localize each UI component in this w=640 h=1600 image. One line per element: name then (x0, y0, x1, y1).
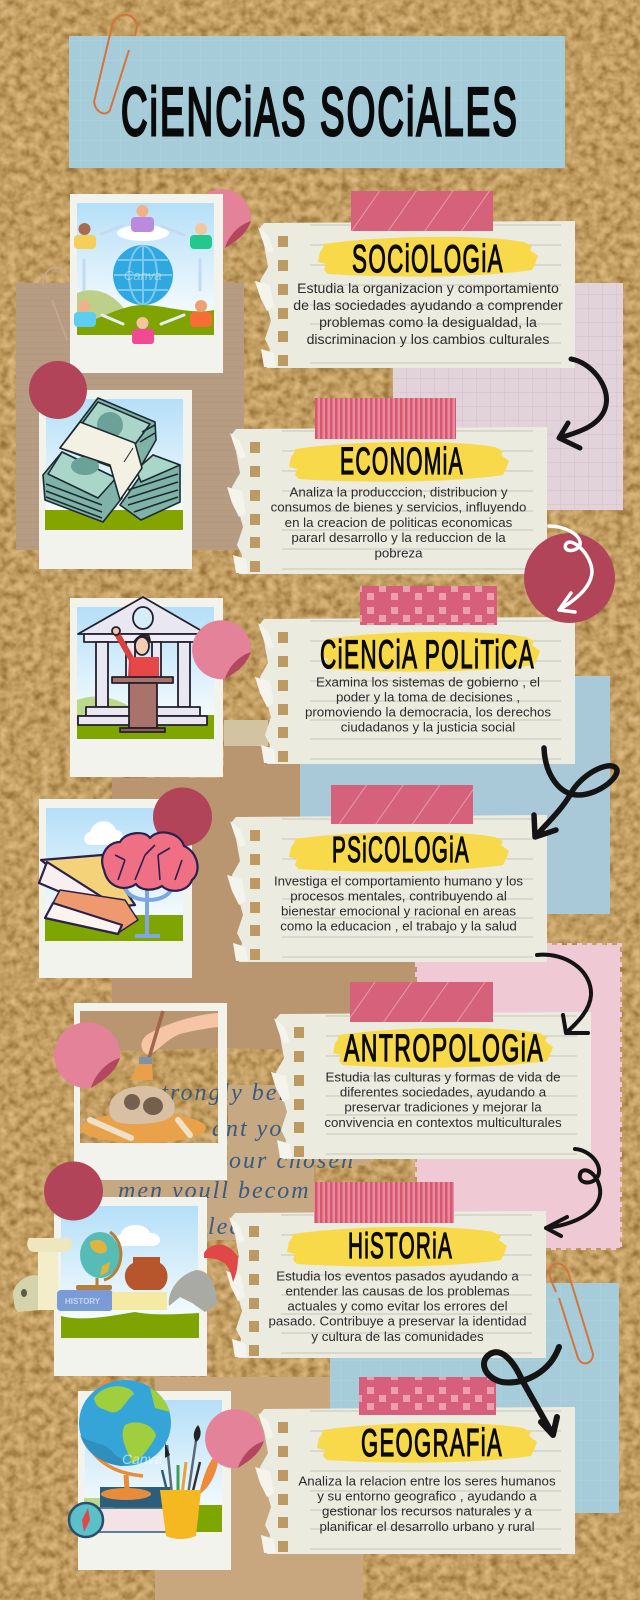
sticker: pink circle 3 (192, 620, 251, 679)
text block: discriminacion y los cambios culturales (307, 331, 549, 347)
heading: HiSTORiA (348, 1225, 453, 1266)
text block: consumos de bienes y servicios, influyendo (271, 500, 526, 514)
sticker: dark red circle 6 (44, 1162, 103, 1220)
panel: photo ciencia politica (70, 597, 223, 777)
highlight (289, 832, 509, 872)
arrow 6 (484, 1347, 559, 1435)
text block: como la educacion , el trabajo y la salud (280, 918, 517, 934)
heading: GEOGRAFiA (361, 1422, 503, 1465)
icon: globe, pencils, compass: Canva (122, 1451, 163, 1467)
text block: Estudia los eventos pasados ayudando a (276, 1268, 519, 1284)
icon: helmet with red plume (169, 1244, 238, 1312)
text block: actuales y como evitar los errores del (287, 1298, 508, 1314)
text block (324, 1070, 562, 1130)
tape (331, 785, 473, 824)
panel: psicologia (227, 785, 547, 962)
panel: photo antropologia (74, 1003, 227, 1180)
arrow 3 (534, 748, 617, 837)
text block: Estudia las culturas y formas de vida de (325, 1070, 561, 1084)
panel: photo economia (39, 390, 192, 569)
paper: light tape band (224, 720, 268, 746)
text block: entender las causas de los problemas (286, 1284, 510, 1298)
text block: Examina los sistemas de gobierno , el (316, 674, 540, 690)
text block: ciudadanos y la justicia social (341, 720, 515, 734)
icon: network of people (74, 205, 214, 344)
highlight (318, 237, 538, 277)
highlight (289, 442, 509, 482)
text block: Investiga el comportamiento humano y los (274, 874, 523, 888)
highlight (287, 1227, 507, 1267)
text block: Estudia la organizacion y comportamiento (297, 280, 559, 296)
text block (274, 874, 523, 934)
illustration: books and brain overlay (39, 832, 198, 936)
heading: SOCiOLOGiA (352, 238, 504, 281)
text block: pararl desarrollo y la reduccion de la (291, 530, 506, 545)
tape (360, 586, 497, 625)
panel: historia (226, 1182, 546, 1358)
icon: politician at podium in front of building (77, 597, 214, 739)
icon: sky and grass (45, 821, 183, 941)
handwritten script background: leers (208, 1214, 265, 1240)
icon: history objects: HISTORY (65, 1297, 101, 1306)
paper clip: faint (43, 268, 69, 340)
paper: pink stamp (417, 945, 620, 1248)
text block (305, 674, 551, 734)
tape (315, 398, 456, 439)
handwritten script background: men youll becom (118, 1178, 311, 1204)
text block (271, 484, 526, 560)
panel: sociologia (255, 191, 575, 368)
sticker: dark red circle 2 (29, 361, 87, 419)
text block: convivencia en contextos multiculturales (324, 1115, 562, 1130)
paper: blue grid lower (330, 1283, 619, 1513)
arrow 5 (546, 1149, 600, 1236)
panel: photo psicologia (39, 799, 192, 978)
paper: blue strip middle (299, 676, 610, 914)
text block: de las sociedades ayudando a comprender (293, 297, 563, 313)
panel: photo historia (13, 1197, 207, 1376)
icon: network of people: Canva (124, 268, 162, 283)
text block: y cultura de las comunidades (311, 1329, 484, 1344)
text block: Analiza la producccion, distribucion y (289, 484, 508, 500)
text block: gestionar los recursos naturales y a (322, 1504, 533, 1518)
text block: procesos mentales, contribuyendo al (290, 888, 507, 904)
text block: planificar el desarrollo urbano y rural (319, 1519, 535, 1534)
tape (359, 1377, 496, 1415)
paper: kraft middle (74, 720, 418, 1052)
tape (314, 1182, 454, 1223)
text block (293, 280, 563, 347)
highlight (333, 1028, 553, 1068)
arrow 4 (537, 955, 591, 1033)
highlight (317, 1423, 537, 1463)
text block: promoviendo la democracia, los derechos (305, 704, 551, 720)
text block: problemas como la desigualdad, la (319, 314, 537, 330)
tape (350, 982, 493, 1022)
sticker: pink circle 7 (205, 1409, 264, 1468)
panel: photo sociologia (70, 194, 223, 373)
text block: en la creacion de politicas economicas (285, 515, 513, 530)
text block: poder y la toma de decisiones , (336, 690, 520, 704)
sticker: big red circle (524, 533, 615, 623)
title panel (69, 36, 565, 168)
icon: globe, pencils, compass (69, 1378, 222, 1539)
text block (298, 1474, 556, 1534)
heading: PSiCOLOGiA (332, 829, 470, 870)
panel: photo geografia (69, 1378, 231, 1570)
tape (351, 191, 493, 231)
text block (269, 1268, 526, 1344)
highlight (320, 632, 540, 672)
text block: preservar tradiciones y mejorar la (344, 1100, 542, 1114)
icon: history objects (13, 1225, 199, 1338)
handwritten script background: our chosen (229, 1148, 355, 1174)
handwritten script background: ant you (212, 1116, 297, 1142)
sticker: dark red circle 4 (153, 788, 212, 846)
panel: ciencia politica (255, 586, 575, 764)
text block: pobreza (374, 546, 423, 560)
handwritten script background: strongly belie (150, 1080, 308, 1106)
paper: script note (102, 1085, 370, 1240)
panel: economia (227, 398, 547, 574)
sticker: pink circle 5 (54, 1022, 120, 1088)
sticker: pink circle behind photo 1 (192, 189, 251, 248)
panel: geografia (255, 1377, 575, 1554)
arrow 1 (559, 359, 607, 448)
paper: kraft bottom (155, 1377, 363, 1600)
paper: brown cardboard (16, 283, 244, 550)
handwritten script background (118, 1080, 355, 1240)
heading: ECONOMiA (340, 441, 464, 483)
icon: skull excavation (80, 1011, 218, 1143)
panel: antropologia (271, 982, 591, 1159)
text block: bienestar emocional y racional en areas (281, 904, 516, 918)
icon: stacks of money (43, 398, 183, 530)
paper: pink grid (393, 283, 623, 510)
text block: Analiza la relacion entre los seres humanos (298, 1474, 556, 1488)
paper clip: lower right (550, 1264, 593, 1363)
text block: pasado. Contribuye a preservar la identidad (269, 1314, 526, 1328)
arrow 2: white swirl (549, 526, 592, 612)
paper clip: title (94, 15, 137, 113)
text block: y su entorno geografico , ayudando a (317, 1488, 537, 1504)
text block: diferentes sociedades, ayudando a (340, 1084, 547, 1100)
